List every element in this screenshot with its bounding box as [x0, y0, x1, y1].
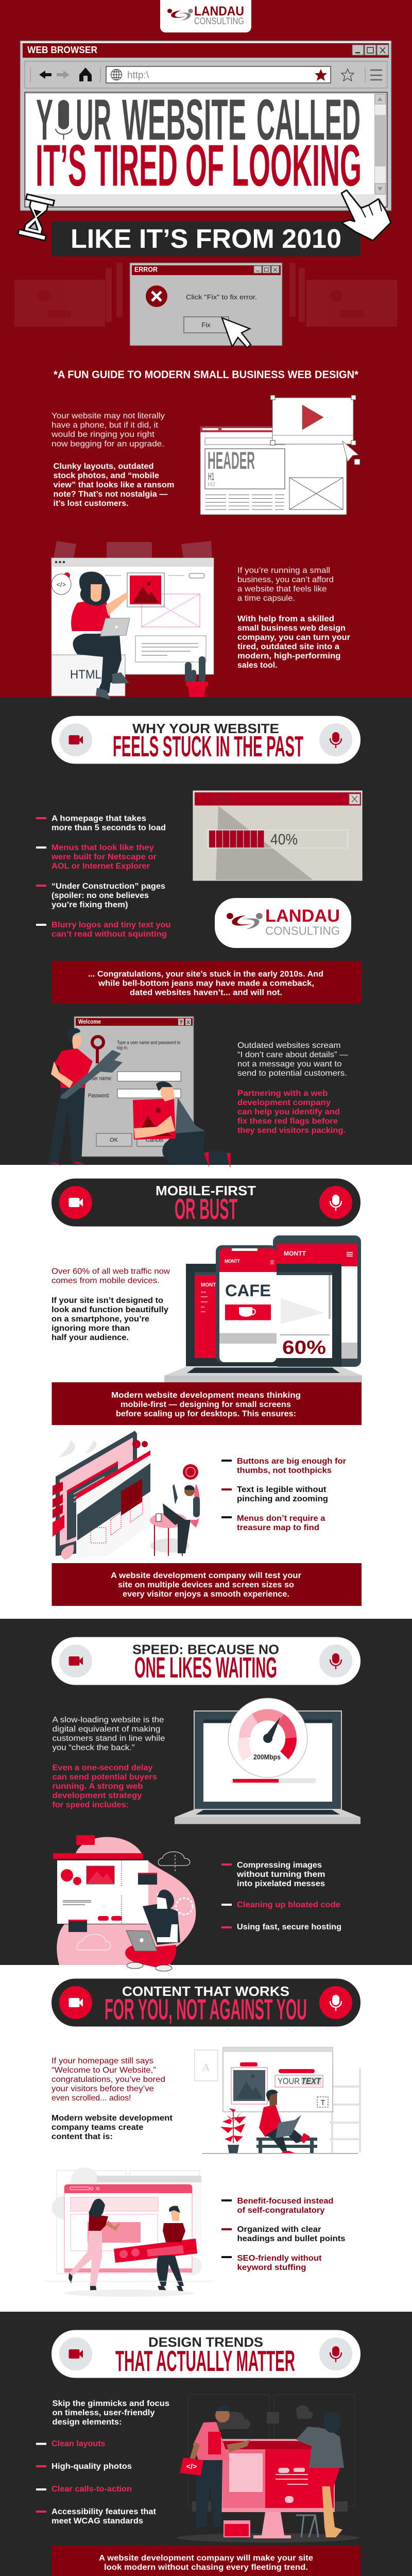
gauge — [244, 1715, 291, 1758]
panel: speed dark background — [0, 1619, 412, 1965]
bullet list: stuck in the past — [36, 814, 171, 939]
illustration: welcome login dialog with two repair men: Cancel — [146, 1137, 163, 1143]
fix button — [184, 317, 229, 333]
icon: pixel hand cursor — [341, 190, 391, 241]
bullet list: stuck in the past: more than 5 seconds to load — [52, 823, 166, 833]
text block: outdated websites: can help you identify and — [237, 1108, 340, 1116]
intro text block: have a phone, but if it did, it — [52, 421, 159, 430]
fix button: Fix — [201, 321, 211, 329]
laptop: 60% — [282, 1337, 326, 1358]
heading: mobile-first or bust: OR BUST — [175, 1193, 237, 1226]
bullet list: content: SEO-friendly without — [237, 2254, 322, 2263]
text block and bullets: design elements: meet WCAG standards — [52, 2517, 143, 2526]
ghost error window details — [38, 290, 364, 318]
laptop — [164, 1264, 362, 1383]
icon: error cross — [146, 285, 167, 307]
illustration: isometric developer at monitor — [53, 1431, 200, 1560]
logo pill: LANDAU — [265, 906, 340, 926]
panel: design trends dark background — [0, 2312, 412, 2576]
man holding picture — [133, 1081, 231, 1168]
callout: testing: site on multiple devices and screen sizes so — [118, 1581, 294, 1589]
bullet list: speed: Using fast, secure hosting — [237, 1923, 341, 1931]
tablet — [273, 1235, 361, 1367]
subtitle: *A FUN GUIDE TO MODERN SMALL BUSINESS WEB DESIGN* — [54, 369, 359, 381]
right intro text block: With help from a skilled — [237, 615, 334, 623]
text block and bullets: design elements: on timeless, user-friendly — [53, 2409, 155, 2417]
text block: slow loading: digital equivalent of making — [53, 1725, 161, 1734]
error dialog window: Click "Fix" to fix error. — [186, 293, 257, 301]
logo pill — [215, 898, 351, 948]
right intro text block — [237, 566, 350, 670]
text block: mobile traffic: on a smartphone, you’re — [52, 1315, 149, 1324]
heading: design trends — [52, 2330, 360, 2378]
designer figure — [116, 1883, 180, 1971]
text block: slow loading: A slow-loading website is the — [53, 1716, 164, 1724]
text block and bullets: design elements: Accessibility features that — [52, 2507, 157, 2516]
bullet list: speed — [221, 1861, 341, 1931]
panel: stuck in the past dark background — [0, 697, 412, 1165]
illustration: content editor with person on bench — [195, 2047, 360, 2154]
right intro text block: modern, high-performing — [237, 652, 341, 660]
bullet list: stuck in the past: Blurry logos and tiny text you — [52, 921, 171, 929]
bullet list: speed: Cleaning up bloated code — [237, 1901, 340, 1909]
illustration: wireframe web page with video: H1 — [208, 471, 214, 483]
illustration: content editor with person on bench: A — [202, 2061, 210, 2074]
text block: homepage: your visitors before they’ve — [52, 2084, 154, 2093]
bullet list: stuck in the past: “Under Construction” pages — [52, 882, 165, 891]
bullet list: stuck in the past: AOL or Internet Explorer — [52, 862, 150, 871]
heading: speed: SPEED: BECAUSE NO — [132, 1641, 279, 1657]
text block: homepage: Modern website development — [52, 2114, 173, 2123]
loading progress window — [193, 791, 362, 880]
illustration: welcome login dialog with two repair men: User name: — [88, 1076, 112, 1082]
right intro text block: small business web design — [237, 624, 346, 633]
illustration: wireframe web page with video: H2 — [208, 481, 215, 488]
intro text block: would be ringing you right — [51, 430, 155, 439]
intro text block: view” that looks like a ransom — [54, 481, 174, 489]
right intro text block: a time capsule. — [237, 594, 295, 603]
bullet list: mobile-first benefits: Buttons are big enough for — [237, 1457, 346, 1466]
text block: mobile traffic: ignoring more than — [52, 1324, 130, 1333]
man with wrench — [48, 1028, 123, 1165]
intro text block: now begging for an upgrade. — [52, 440, 164, 448]
right intro text block: a website that feels like — [237, 585, 327, 594]
right intro text block: sales tool. — [237, 661, 277, 670]
illustration: two designers at a large monitor — [177, 2395, 359, 2543]
logo tab: LANDAU — [194, 4, 244, 19]
bullet list: speed: into pixelated messes — [237, 1879, 325, 1888]
callout: fleeting trend: A website development company will make your site — [99, 2554, 313, 2563]
illustration: content editor with person on bench: YOUR — [278, 2076, 300, 2086]
text block: mobile traffic: If your site isn’t designed to — [52, 1296, 163, 1305]
text block: slow loading: you “check the back.” — [53, 1743, 135, 1752]
text block: mobile traffic: comes from mobile devices. — [52, 1277, 160, 1285]
text block and bullets: design elements — [36, 2399, 169, 2526]
browser window — [20, 41, 391, 211]
text block: homepage: even scrolled... adios! — [52, 2094, 131, 2103]
text block: outdated websites: development company — [237, 1098, 331, 1107]
phone: MONTT — [225, 1259, 240, 1264]
text block: slow loading: Even a one-second delay — [53, 1764, 153, 1772]
text block: mobile traffic: look and function beautifully — [52, 1306, 168, 1314]
bench and person — [256, 2090, 317, 2154]
callout: congratulations: dated websites haven’t... and will not. — [130, 989, 282, 997]
ghost error windows — [14, 263, 397, 327]
right intro text block: company, you can turn your — [237, 633, 350, 642]
illustration: woman designing a web page: </> — [57, 581, 66, 588]
loading progress window: CONSULTING — [212, 801, 233, 804]
text block: outdated websites — [237, 1041, 348, 1135]
headline line one: Y — [36, 88, 53, 152]
logo tab — [160, 0, 251, 32]
illustration: welcome login dialog with two repair men: OK — [110, 1137, 118, 1143]
illustration: woman designing a web page — [52, 541, 214, 700]
text block: outdated websites: fix these red flags before — [237, 1117, 338, 1126]
illustration: welcome login dialog with two repair men — [48, 1016, 231, 1168]
bullet list: stuck in the past: can’t read without squinting — [52, 930, 167, 939]
intro text block — [51, 412, 174, 508]
text block: homepage: company teams create — [52, 2123, 144, 2132]
bullet list: mobile-first benefits: Menus don’t require a — [237, 1514, 325, 1523]
right intro text block: If you’re running a small — [237, 566, 330, 575]
phone — [216, 1245, 277, 1363]
panel: mobile-first white background — [0, 1165, 412, 1619]
illustration: welcome login dialog with two repair men: Type a user name and password to — [117, 1040, 180, 1046]
bullet list: content: headings and bullet points — [237, 2234, 346, 2243]
heading: content that works — [52, 1978, 360, 2027]
callout: mobile-first: Modern website development means thinking — [111, 1391, 301, 1400]
callout: testing: A website development company will test your — [111, 1571, 301, 1580]
text block: slow loading: customers stand in line while — [53, 1734, 165, 1743]
heading: why your website feels stuck in the past: WHY YOUR WEBSITE — [132, 721, 279, 736]
bullet list: content: Benefit-focused instead — [237, 2197, 334, 2206]
cactus plant — [185, 656, 208, 697]
text block: outdated websites: send to potential customers. — [237, 1069, 347, 1078]
panel: hero red background — [0, 0, 412, 697]
woman in hoodie — [296, 2412, 344, 2537]
laptop: MONT — [201, 1282, 216, 1288]
text block: mobile traffic: Over 60% of all web traffic now — [52, 1267, 170, 1276]
bullet list: mobile-first benefits — [221, 1457, 346, 1532]
illustration: two people rebuilding a web page — [44, 2167, 213, 2297]
illustration: welcome login dialog with two repair men: ? — [179, 1020, 183, 1026]
heading: content that works: CONTENT THAT WORKS — [122, 1984, 289, 1999]
logo pill: CONSULTING — [265, 924, 340, 938]
heading: mobile-first or bust: MOBILE-FIRST — [156, 1183, 256, 1198]
callout: mobile-first: mobile-first — designing for small screens — [121, 1400, 291, 1409]
illustration: welcome login dialog with two repair men: Welcome — [78, 1018, 101, 1025]
text block: homepage: If your homepage still says — [52, 2057, 153, 2065]
text block: slow loading: development strategy — [53, 1791, 142, 1800]
bullet list: stuck in the past: (spoiler: no one believes — [52, 891, 149, 900]
illustration: woman designing a web page: HTML — [70, 668, 101, 682]
heading: why your website feels stuck in the past — [52, 716, 360, 764]
man with code sheet — [180, 2406, 250, 2527]
intro text block: note? That’s not nostalgia — — [54, 490, 168, 499]
callout: testing — [52, 1563, 362, 1606]
text block: slow loading: running. A strong web — [53, 1782, 143, 1791]
bullet list: content: of self-congratulatory — [237, 2206, 325, 2215]
illustration: welcome login dialog with two repair men: log in. — [117, 1045, 128, 1051]
loading progress window: 40% — [270, 832, 298, 848]
text block: slow loading: for speed includes: — [53, 1801, 129, 1809]
icon: pixel hourglass — [18, 194, 54, 241]
logo tab: CONSULTING — [194, 16, 244, 26]
text block: slow loading — [53, 1716, 165, 1809]
text block and bullets: design elements: Clean layouts — [52, 2439, 106, 2448]
woman figure — [71, 572, 130, 700]
code language tags — [53, 1482, 64, 1537]
right intro text block: tired, outdated site into a — [237, 642, 339, 651]
illustration: wireframe web page with video: HEADER — [208, 447, 255, 474]
callout: congratulations: while bell-bottom jeans may have made a comeback, — [98, 979, 314, 988]
illustration: content editor with person on bench: TEXT — [301, 2076, 321, 2086]
bullet list: speed: without turning them — [236, 1870, 325, 1879]
bullet list: content: keyword stuffing — [237, 2263, 306, 2272]
man with code sheet: </> — [186, 2462, 197, 2470]
illustration: laptop with speedometer: 200Mbps — [253, 1753, 281, 1761]
panel: content white background — [0, 1965, 412, 2312]
text block: slow loading: can send potential buyers — [53, 1773, 157, 1782]
intro text block: Clunky layouts, outdated — [54, 462, 153, 471]
text block: outdated websites: they send visitors packing. — [237, 1126, 346, 1135]
woman — [68, 2199, 121, 2293]
bullet list: stuck in the past: Menus that look like they — [52, 843, 154, 852]
text block and bullets: design elements: High-quality photos — [52, 2462, 132, 2471]
bullet list: stuck in the past: were built for Netscape or — [51, 853, 157, 861]
text block and bullets: design elements: design elements: — [53, 2418, 122, 2427]
icon: pixel arrow cursor — [222, 318, 251, 348]
callout: congratulations — [52, 961, 362, 1004]
callout: mobile-first — [52, 1382, 362, 1425]
bullet list: mobile-first benefits: pinching and zooming — [237, 1495, 328, 1503]
intro text block: Your website may not literally — [52, 412, 165, 420]
tablet: MONTT — [284, 1250, 306, 1257]
icon: microphone letter O — [56, 100, 72, 140]
text block: homepage — [52, 2057, 173, 2141]
illustration: content editor with person on bench: T — [320, 2098, 325, 2107]
heading: design trends: DESIGN TRENDS — [148, 2334, 263, 2350]
callout: mobile-first: before scaling up for desktops. This ensures: — [116, 1410, 296, 1418]
text block and bullets: design elements: Clear calls-to-action — [52, 2485, 132, 2494]
bullet list: speed: Compressing images — [237, 1861, 322, 1870]
heading: mobile-first or bust — [52, 1179, 360, 1226]
callout: testing: every visitor enjoys a smooth experience. — [123, 1590, 289, 1599]
text block: homepage: congratulations, you’ve bored — [52, 2075, 165, 2084]
headline line one: WEBSITE — [122, 88, 246, 152]
bullet list: mobile-first benefits: treasure map to find — [237, 1523, 319, 1532]
text block: mobile traffic — [52, 1267, 170, 1342]
text block: homepage: “Welcome to Our Website,” — [52, 2066, 156, 2075]
error dialog window — [130, 263, 282, 348]
seated developer — [150, 1464, 200, 1556]
bullet list: mobile-first benefits: Text is legible without — [237, 1485, 327, 1494]
text block: outdated websites: Partnering with a web — [237, 1089, 328, 1098]
browser window: http:\ — [127, 70, 149, 81]
bullet list: content — [221, 2197, 346, 2272]
text block: outdated websites: Outdated websites scream — [237, 1041, 341, 1050]
bullet list: mobile-first benefits: thumbs, not toothpicks — [237, 1466, 332, 1475]
callout: congratulations: ... Congratulations, your site’s stuck in the early 2010s. And — [88, 970, 323, 979]
phone: CAFE — [225, 1281, 271, 1300]
browser window: WEB BROWSER — [27, 44, 97, 55]
bullet list: stuck in the past: A homepage that takes — [52, 814, 146, 823]
intro text block: stock photos, and “mobile — [54, 471, 159, 480]
callout: fleeting trend — [52, 2546, 360, 2576]
headline banner: like it's from 2010: LIKE IT’S FROM 2010 — [71, 224, 341, 254]
text block: mobile traffic: half your audience. — [52, 1333, 129, 1342]
illustration: laptop with speedometer — [175, 1698, 360, 1824]
illustration: welcome login dialog with two repair men: Password: — [88, 1093, 110, 1099]
intro text block: it’s lost customers. — [54, 499, 129, 508]
illustration: welcome login dialog with two repair men: X — [186, 1020, 191, 1026]
headline line one: UR — [76, 88, 111, 152]
man — [157, 2206, 185, 2293]
illustration: wireframe web page with video — [200, 395, 360, 515]
heading: speed — [52, 1637, 360, 1685]
illustration: tablet, laptop and phone cafe site — [164, 1235, 362, 1383]
loading progress window: LANDAU — [212, 795, 233, 800]
bullet list: content: Organized with clear — [237, 2225, 321, 2234]
error dialog window: ERROR — [134, 265, 158, 273]
text block: homepage: content that is: — [52, 2132, 113, 2141]
callout: fleeting trend: look modern without chasing every fleeting trend. — [104, 2563, 308, 2572]
text block: outdated websites: “I don’t care about details” — — [237, 1050, 348, 1059]
bullet list: stuck in the past: you’re fixing them) — [52, 901, 128, 909]
text block: outdated websites: not a message you want to — [237, 1060, 342, 1069]
right intro text block: business, you can’t afford — [237, 575, 334, 584]
potted plant — [220, 2108, 246, 2154]
headline line one — [36, 88, 360, 152]
illustration: designer with laptop and wireframe — [53, 1835, 196, 1971]
text block and bullets: design elements: Skip the gimmicks and focus — [53, 2399, 169, 2408]
